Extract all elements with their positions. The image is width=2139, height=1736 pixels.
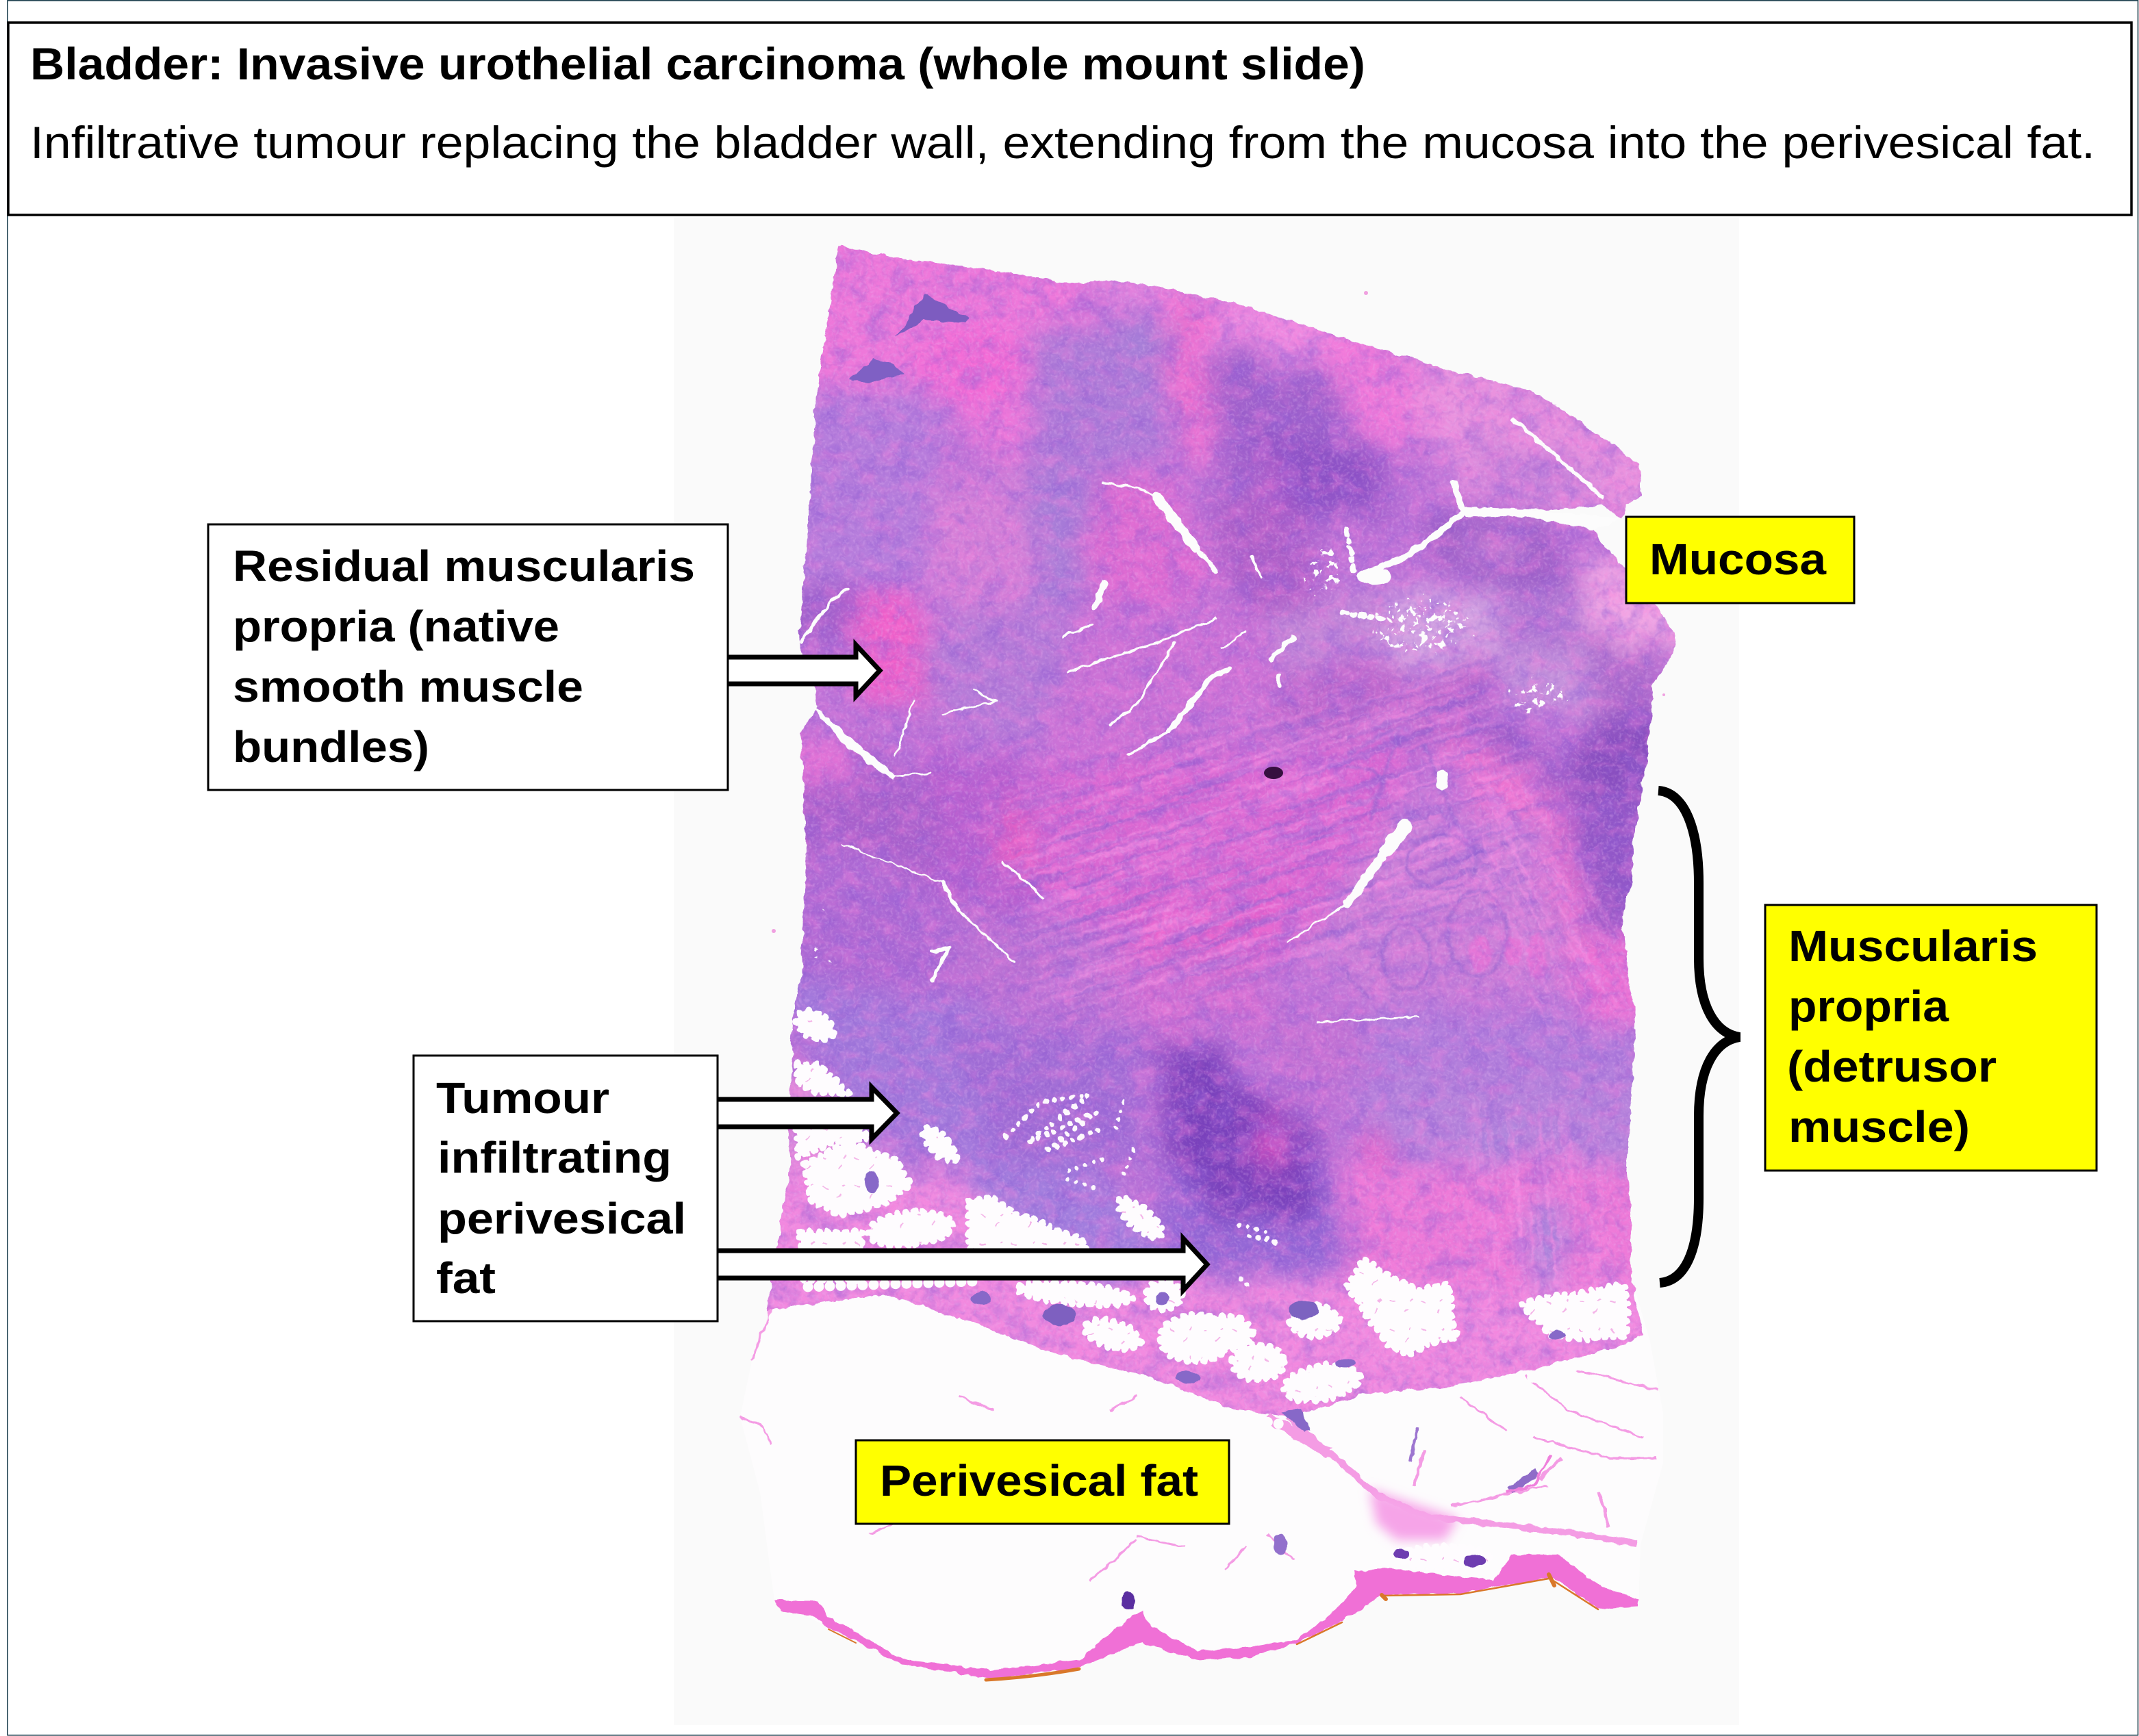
callout: residual muscularis propria <box>208 524 728 790</box>
callout: tumour infiltrating perivesical fat: infiltrating <box>438 1133 672 1182</box>
label: muscularis propria: (detrusor <box>1787 1042 1997 1091</box>
arrow: tumour in fat, lower <box>705 1238 1207 1290</box>
pink muscle bundles <box>906 388 1547 981</box>
dense tissue: muscle and tumour <box>767 245 1676 1417</box>
fat vacuoles inside tumour <box>1007 1095 1277 1287</box>
label: perivesical fat: Perivesical fat <box>880 1456 1198 1505</box>
title: Bladder: Invasive urothelial carcinoma (whole mount slide) <box>30 38 1365 89</box>
callout: tumour infiltrating perivesical fat: fat <box>436 1253 496 1303</box>
label: muscularis propria: muscle) <box>1788 1102 1970 1151</box>
perivesical fat base <box>740 1095 1663 1677</box>
stray tissue specks <box>772 291 1665 933</box>
colour fields, lower section <box>1315 1164 1671 1287</box>
header panel <box>8 23 2131 215</box>
colour fields, upper section <box>777 209 1704 1164</box>
callout: residual muscularis propria: propria (native <box>233 602 559 651</box>
dark artefact <box>1264 767 1283 779</box>
tissue mottling <box>753 233 1684 1465</box>
slide image: whole mount H&E section <box>739 245 1676 1681</box>
callout: tumour infiltrating perivesical fat: Tumour <box>436 1073 609 1123</box>
purple strands around muscle bundles <box>1346 719 1509 999</box>
callout: residual muscularis propria: Residual muscularis <box>233 541 695 591</box>
connective strands in the fat <box>740 1309 1657 1581</box>
orange ink crust <box>828 1574 1598 1680</box>
bottom capsule strip <box>774 1555 1638 1678</box>
label: muscularis propria <box>1765 905 2097 1171</box>
subtitle: Infiltrative tumour replacing the bladder wall, extending from the mucosa into the perivesical fat. <box>30 117 2095 168</box>
label: muscularis propria: propria <box>1788 982 1949 1031</box>
callout: residual muscularis propria: smooth muscle <box>233 662 583 711</box>
cracks and tears <box>800 420 1621 1023</box>
pale fibrous patch <box>1369 1489 1458 1540</box>
slide background <box>674 218 1739 1725</box>
scalloped fat edge beneath stroma <box>774 1281 1624 1425</box>
label: perivesical fat <box>856 1440 1229 1524</box>
arrow: tumour in fat, upper <box>705 1087 897 1139</box>
mucosal debris speckle <box>807 530 1584 1004</box>
brace: muscularis propria extent <box>1658 791 1740 1283</box>
label: mucosa: Mucosa <box>1649 535 1826 584</box>
purple cell clusters <box>849 294 1565 1609</box>
callout: residual muscularis propria: bundles) <box>233 722 429 771</box>
label: muscularis propria: Muscularis <box>1788 921 2038 971</box>
arrow: residual muscularis propria <box>719 645 880 696</box>
fat lobules in and around the tumour <box>792 1005 1628 1568</box>
callout: tumour infiltrating perivesical fat: perivesical <box>438 1194 686 1243</box>
label: mucosa <box>1626 517 1854 603</box>
fibre streaks in central muscle <box>987 645 1641 1330</box>
callout: tumour infiltrating perivesical fat <box>414 1056 718 1321</box>
